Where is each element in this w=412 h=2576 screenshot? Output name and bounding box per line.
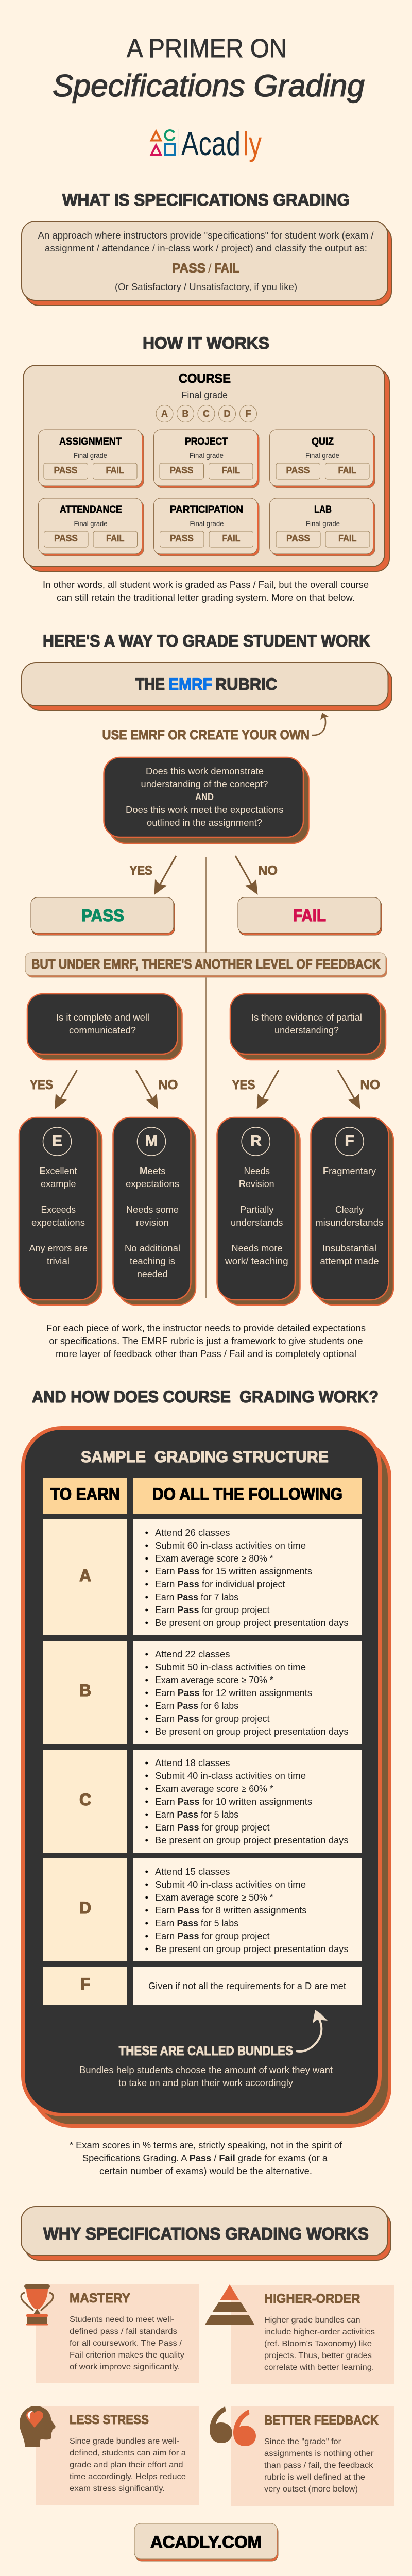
card: mastery: for all coursework. The Pass / [70, 2339, 182, 2348]
card: F fragmentary: attempt made [320, 1256, 379, 1266]
card: E excellent: Exceeds [41, 1205, 76, 1215]
table row: A: Exam average score ≥ 80% * [155, 1553, 273, 1564]
card: M meets: revision [136, 1217, 169, 1228]
card: M meets: needed [137, 1269, 168, 1279]
table row: B: Attend 22 classes [155, 1649, 230, 1659]
card: participation [153, 498, 259, 556]
card: assignment: Final grade [74, 452, 107, 460]
note: exam scores: Specifications Grading. A Pass / Fail grade for exams (or a [82, 2153, 328, 2163]
card: better feedback: BETTER FEEDBACK [264, 2413, 379, 2428]
table row: B: Be present on group project presentation days [155, 1726, 348, 1737]
table row: C: Earn Pass for 5 labs [155, 1809, 238, 1820]
card: mastery: MASTERY [70, 2291, 130, 2306]
text: for each piece of work: For each piece of work, the instructor needs to provide detailed expectations [46, 1323, 366, 1333]
card: less stress: time accordingly. Helps reduce [70, 2472, 186, 2481]
panel: EMRF rubric: THE [135, 675, 165, 693]
card: lab: LAB [314, 504, 332, 515]
note: exam scores: certain number of exams) would be the alternative. [99, 2166, 312, 2176]
arrow: up to rubric [312, 713, 329, 735]
title: A PRIMER ON [127, 33, 287, 63]
heading: how does course grading work: AND HOW DOES COURSE GRADING WORK? [32, 1387, 379, 1406]
card: E excellent: Excellent [39, 1166, 77, 1176]
card: higher-order: include higher-order activities [264, 2328, 375, 2336]
card: mastery: Fail criterion makes the quality [70, 2351, 184, 2360]
pass fail label: / [208, 262, 212, 276]
card: R needs revision: R [250, 1132, 262, 1149]
icon: pyramid [205, 2284, 254, 2325]
card: mastery: Students need to meet well- [70, 2315, 174, 2324]
text: for each piece of work: more layer of feedback other than Pass / Fail and is completely optional [56, 1349, 356, 1359]
table row: B: Earn Pass for 6 labs [155, 1701, 238, 1711]
card: F fragmentary: F [345, 1132, 354, 1149]
table row: A: A [79, 1566, 91, 1585]
card: less stress: exam stress significantly. [70, 2484, 165, 2493]
text: for each piece of work: or specifications. The EMRF rubric is just a framework to give students one [49, 1336, 363, 1346]
card: M meets: Meets [140, 1166, 166, 1176]
table row: F [43, 1967, 362, 2005]
box: pass [31, 897, 175, 935]
card: less stress: LESS STRESS [70, 2413, 149, 2427]
panel: main question: understanding of the concept? [141, 779, 268, 789]
table row: A: Earn Pass for individual project [155, 1579, 285, 1589]
card: attendance: Final grade [74, 520, 107, 528]
card: M meets: teaching is [130, 1256, 175, 1266]
box: pass: PASS [81, 906, 124, 925]
logo: Acadly: Acad [181, 125, 241, 162]
card: lab: FAIL [338, 533, 357, 544]
table row: D: D [79, 1899, 91, 1917]
pass fail label: FAIL [214, 261, 239, 276]
card: project: FAIL [222, 465, 240, 476]
card: F fragmentary: Insubstantial [322, 1243, 376, 1253]
heading: what is specifications grading: WHAT IS SPECIFICATIONS GRADING [62, 191, 350, 209]
pass fail label: PASS [172, 261, 205, 276]
card: E excellent: expectations [31, 1217, 85, 1228]
card: R needs revision: Revision [239, 1179, 274, 1189]
panel: why specifications grading works: WHY SPECIFICATIONS GRADING WORKS [43, 2224, 369, 2243]
table row: D [43, 1858, 362, 1961]
panel: definition: (Or Satisfactory / Unsatisfactory, if you like) [115, 282, 297, 292]
table row: D: Earn Pass for group project [155, 1931, 270, 1941]
table row: B [43, 1641, 362, 1744]
card: M meets: Needs some [126, 1205, 179, 1215]
card: attendance: FAIL [106, 533, 125, 544]
letter grades: D [224, 409, 231, 419]
text: bundles explanation [79, 2065, 333, 2088]
table row: D: Be present on group project presentation days [155, 1944, 348, 1954]
card: R needs revision [217, 1117, 300, 1305]
card: better feedback: rubric is well defined at the [264, 2473, 365, 2482]
table row: F: Given if not all the requirements for a D are met [148, 1981, 346, 1991]
card: quiz: FAIL [338, 465, 356, 476]
note: exam scores: * Exam scores in % terms are, strictly speaking, not in the spirit of [70, 2140, 342, 2150]
card: project: PROJECT [185, 436, 228, 447]
callout: use EMRF or create your own: USE EMRF OR CREATE YOUR OWN [102, 727, 310, 742]
card: lab: Final grade [306, 520, 340, 528]
icon: head with heart [20, 2406, 56, 2447]
card: assignment: ASSIGNMENT [59, 436, 122, 447]
label: no: NO [258, 863, 278, 878]
panel: definition [22, 221, 391, 306]
letter grades: A [161, 409, 168, 419]
arrow: to bundles [296, 2010, 328, 2052]
button: acadly.com: ACADLY.COM [150, 2533, 262, 2551]
card: project: Final grade [190, 452, 224, 460]
title: Specifications Grading [53, 69, 365, 103]
card: attendance: ATTENDANCE [60, 504, 122, 515]
table row: B: Earn Pass for 12 written assignments [155, 1688, 312, 1698]
text: in other words [43, 580, 369, 603]
panel: main question: Does this work meet the expectations [126, 805, 283, 815]
panel: main question [104, 757, 309, 843]
card: less stress: defined, students can aim for a [70, 2449, 186, 2458]
panel: partial understanding question: Is there evidence of partial [251, 1012, 362, 1023]
card: participation: PARTICIPATION [170, 504, 243, 515]
card: lab [270, 498, 375, 556]
arrow: no to F [338, 1070, 360, 1109]
card: mastery: defined pass / fail standards [70, 2327, 177, 2336]
card: F fragmentary: misunderstands [315, 1217, 383, 1228]
card: better feedback: assignments is nothing other [264, 2449, 374, 2458]
panel: EMRF rubric: RUBRIC [215, 675, 277, 693]
card: higher-order: correlate with better learning. [264, 2363, 374, 2372]
table row: A: Be present on group project presentation days [155, 1618, 348, 1628]
table row: D: Earn Pass for 5 labs [155, 1918, 238, 1928]
label: no right: NO [360, 1078, 380, 1092]
card: E excellent: trivial [47, 1256, 70, 1266]
card: project: PASS [170, 465, 194, 476]
arrow: no to M [136, 1070, 158, 1109]
card: R needs revision: work/ teaching [225, 1256, 288, 1266]
card: assignment: PASS [54, 465, 77, 476]
card: quiz: Final grade [305, 452, 339, 460]
panel: course structure: Final grade [181, 390, 228, 400]
card: less stress [20, 2406, 199, 2505]
panel: course structure [23, 365, 389, 571]
card: R needs revision: Needs more [232, 1243, 282, 1253]
card: E excellent [19, 1117, 102, 1305]
card: higher-order: HIGHER-ORDER [264, 2292, 360, 2306]
card: better feedback: Since the "grade" for [264, 2437, 341, 2446]
card: assignment: FAIL [106, 465, 124, 476]
text: for each piece of work [46, 1323, 366, 1359]
heading: how it works: HOW IT WORKS [143, 334, 269, 352]
card: higher-order: projects. Thus, better grades [264, 2351, 372, 2360]
arrow: yes to E [55, 1070, 77, 1109]
icon: trophy [21, 2284, 53, 2326]
card: participation: PASS [170, 533, 194, 544]
table row: C: Be present on group project presentation days [155, 1835, 348, 1845]
panel: sample grading structure [23, 1428, 389, 2126]
panel: partial understanding question [230, 994, 386, 1060]
table row: D: Attend 15 classes [155, 1867, 230, 1877]
box: fail: FAIL [293, 906, 326, 925]
card: less stress: Since grade bundles are well- [70, 2437, 179, 2446]
card: project [153, 430, 259, 488]
table row: A [43, 1519, 362, 1635]
card: lab: PASS [286, 533, 310, 544]
label: no left: NO [158, 1078, 178, 1092]
card: E excellent: Any errors are [29, 1243, 88, 1253]
card: M meets [113, 1117, 196, 1305]
panel: EMRF rubric [22, 663, 392, 710]
banner: another level of feedback [25, 953, 387, 977]
panel: main question: Does this work demonstrate [146, 766, 264, 776]
card: F fragmentary [311, 1117, 393, 1305]
logo: Acadly: ly [243, 125, 262, 162]
table header: DO ALL THE FOLLOWING [152, 1485, 342, 1503]
text: bundles explanation: to take on and plan their work accordingly [118, 2078, 293, 2088]
card: R needs revision: Needs [244, 1166, 270, 1176]
table row: B: Exam average score ≥ 70% * [155, 1675, 273, 1685]
card: M meets: M [145, 1132, 158, 1149]
table row: C: Submit 40 in-class activities on time [155, 1771, 306, 1781]
card: E excellent: E [52, 1132, 62, 1149]
table row: C: Earn Pass for group project [155, 1822, 270, 1833]
table header: TO EARN [50, 1485, 120, 1503]
title [53, 33, 365, 103]
panel: sample grading structure: SAMPLE GRADING STRUCTURE [81, 1448, 329, 1466]
center divider line [205, 857, 207, 1298]
table row: C: Exam average score ≥ 60% * [155, 1784, 273, 1794]
card: higher-order [205, 2284, 394, 2384]
card: F fragmentary: Fragmentary [323, 1166, 376, 1176]
table row: B: Submit 50 in-class activities on time [155, 1662, 306, 1672]
arrow: yes to R [256, 1070, 279, 1109]
table row: B: Earn Pass for group project [155, 1714, 270, 1724]
label: yes: YES [130, 863, 152, 878]
text: in other words: can still retain the traditional letter grading system. More on that below. [57, 592, 355, 603]
card: better feedback: than pass / fail, the feedback [264, 2461, 374, 2470]
letter grades: B [182, 409, 188, 419]
icon: quote marks [210, 2406, 256, 2446]
panel: course structure: COURSE [179, 371, 231, 386]
arrow: no to fail [235, 856, 258, 895]
note: exam scores [70, 2140, 342, 2176]
card: attendance [38, 498, 144, 556]
pass fail label [172, 261, 239, 276]
panel: definition: An approach where instructors provide "specifications" for student work (exam / [38, 230, 374, 241]
table row: A: Earn Pass for 7 labs [155, 1592, 238, 1602]
text: in other words: In other words, all student work is graded as Pass / Fail, but the overall course [43, 580, 369, 590]
card: better feedback [210, 2406, 394, 2506]
panel: EMRF rubric: EMRF [168, 675, 212, 693]
card: participation: FAIL [222, 533, 241, 544]
panel: complete question [27, 994, 182, 1060]
table row: C: Attend 18 classes [155, 1758, 230, 1768]
card: quiz [270, 430, 375, 488]
table row: C: Earn Pass for 10 written assignments [155, 1797, 312, 1807]
table row: D: Earn Pass for 8 written assignments [155, 1905, 306, 1916]
label: yes right: YES [232, 1078, 255, 1092]
text: bundles explanation: Bundles help students choose the amount of work they want [79, 2065, 333, 2075]
card: R needs revision: Partially [240, 1205, 274, 1215]
card: M meets: expectations [126, 1179, 179, 1189]
table row: F: F [80, 1975, 90, 1993]
card: higher-order: Higher grade bundles can [264, 2316, 360, 2325]
arrow: yes to pass [154, 856, 176, 895]
card: R needs revision: understands [231, 1217, 283, 1228]
table row: C [43, 1750, 362, 1853]
panel: main question: AND [195, 792, 214, 802]
card: mastery: of work improve significantly. [70, 2363, 180, 2371]
table row: C: C [79, 1790, 91, 1809]
card: M meets: No additional [125, 1243, 180, 1253]
card: better feedback: very outset (more below) [264, 2485, 358, 2494]
card: quiz: QUIZ [312, 436, 334, 447]
heading: here's a way to grade student work: HERE'S A WAY TO GRADE STUDENT WORK [43, 632, 370, 650]
letter grades [156, 405, 256, 422]
card: F fragmentary: Clearly [335, 1205, 364, 1215]
card: higher-order: (ref. Bloom's Taxonomy) like [264, 2340, 372, 2348]
card: participation: Final grade [190, 520, 224, 528]
card: E excellent: example [41, 1179, 76, 1189]
card: less stress: grade and plan their effort and [70, 2461, 183, 2469]
button: acadly.com [134, 2523, 278, 2561]
panel: definition: assignment / attendance / in-class work / project) and classify the output as: [45, 243, 367, 253]
panel: complete question: Is it complete and well [56, 1012, 149, 1023]
card: assignment [38, 430, 144, 488]
box: fail [238, 897, 382, 935]
table header [43, 1478, 362, 1514]
card: mastery [21, 2284, 199, 2383]
callout: these are called bundles: THESE ARE CALLED BUNDLES [119, 2044, 293, 2058]
logo: Acadly [151, 125, 262, 162]
card: attendance: PASS [54, 533, 78, 544]
table row: A: Earn Pass for 15 written assignments [155, 1566, 312, 1577]
panel: complete question: communicated? [69, 1025, 136, 1036]
table row: D: Exam average score ≥ 50% * [155, 1892, 273, 1903]
table row: A: Submit 60 in-class activities on time [155, 1540, 306, 1551]
panel: main question: outlined in the assignment? [147, 818, 262, 828]
letter grades: C [203, 409, 210, 419]
table row: A: Attend 26 classes [155, 1528, 230, 1538]
table row: B: B [79, 1681, 91, 1700]
letter grades: F [245, 409, 251, 419]
panel: why specifications grading works [21, 2207, 391, 2260]
panel: partial understanding question: understanding? [274, 1025, 339, 1036]
table row: A: Earn Pass for group project [155, 1605, 270, 1615]
table row: D: Submit 40 in-class activities on time [155, 1879, 306, 1890]
label: yes left: YES [30, 1078, 53, 1092]
card: quiz: PASS [286, 465, 310, 476]
